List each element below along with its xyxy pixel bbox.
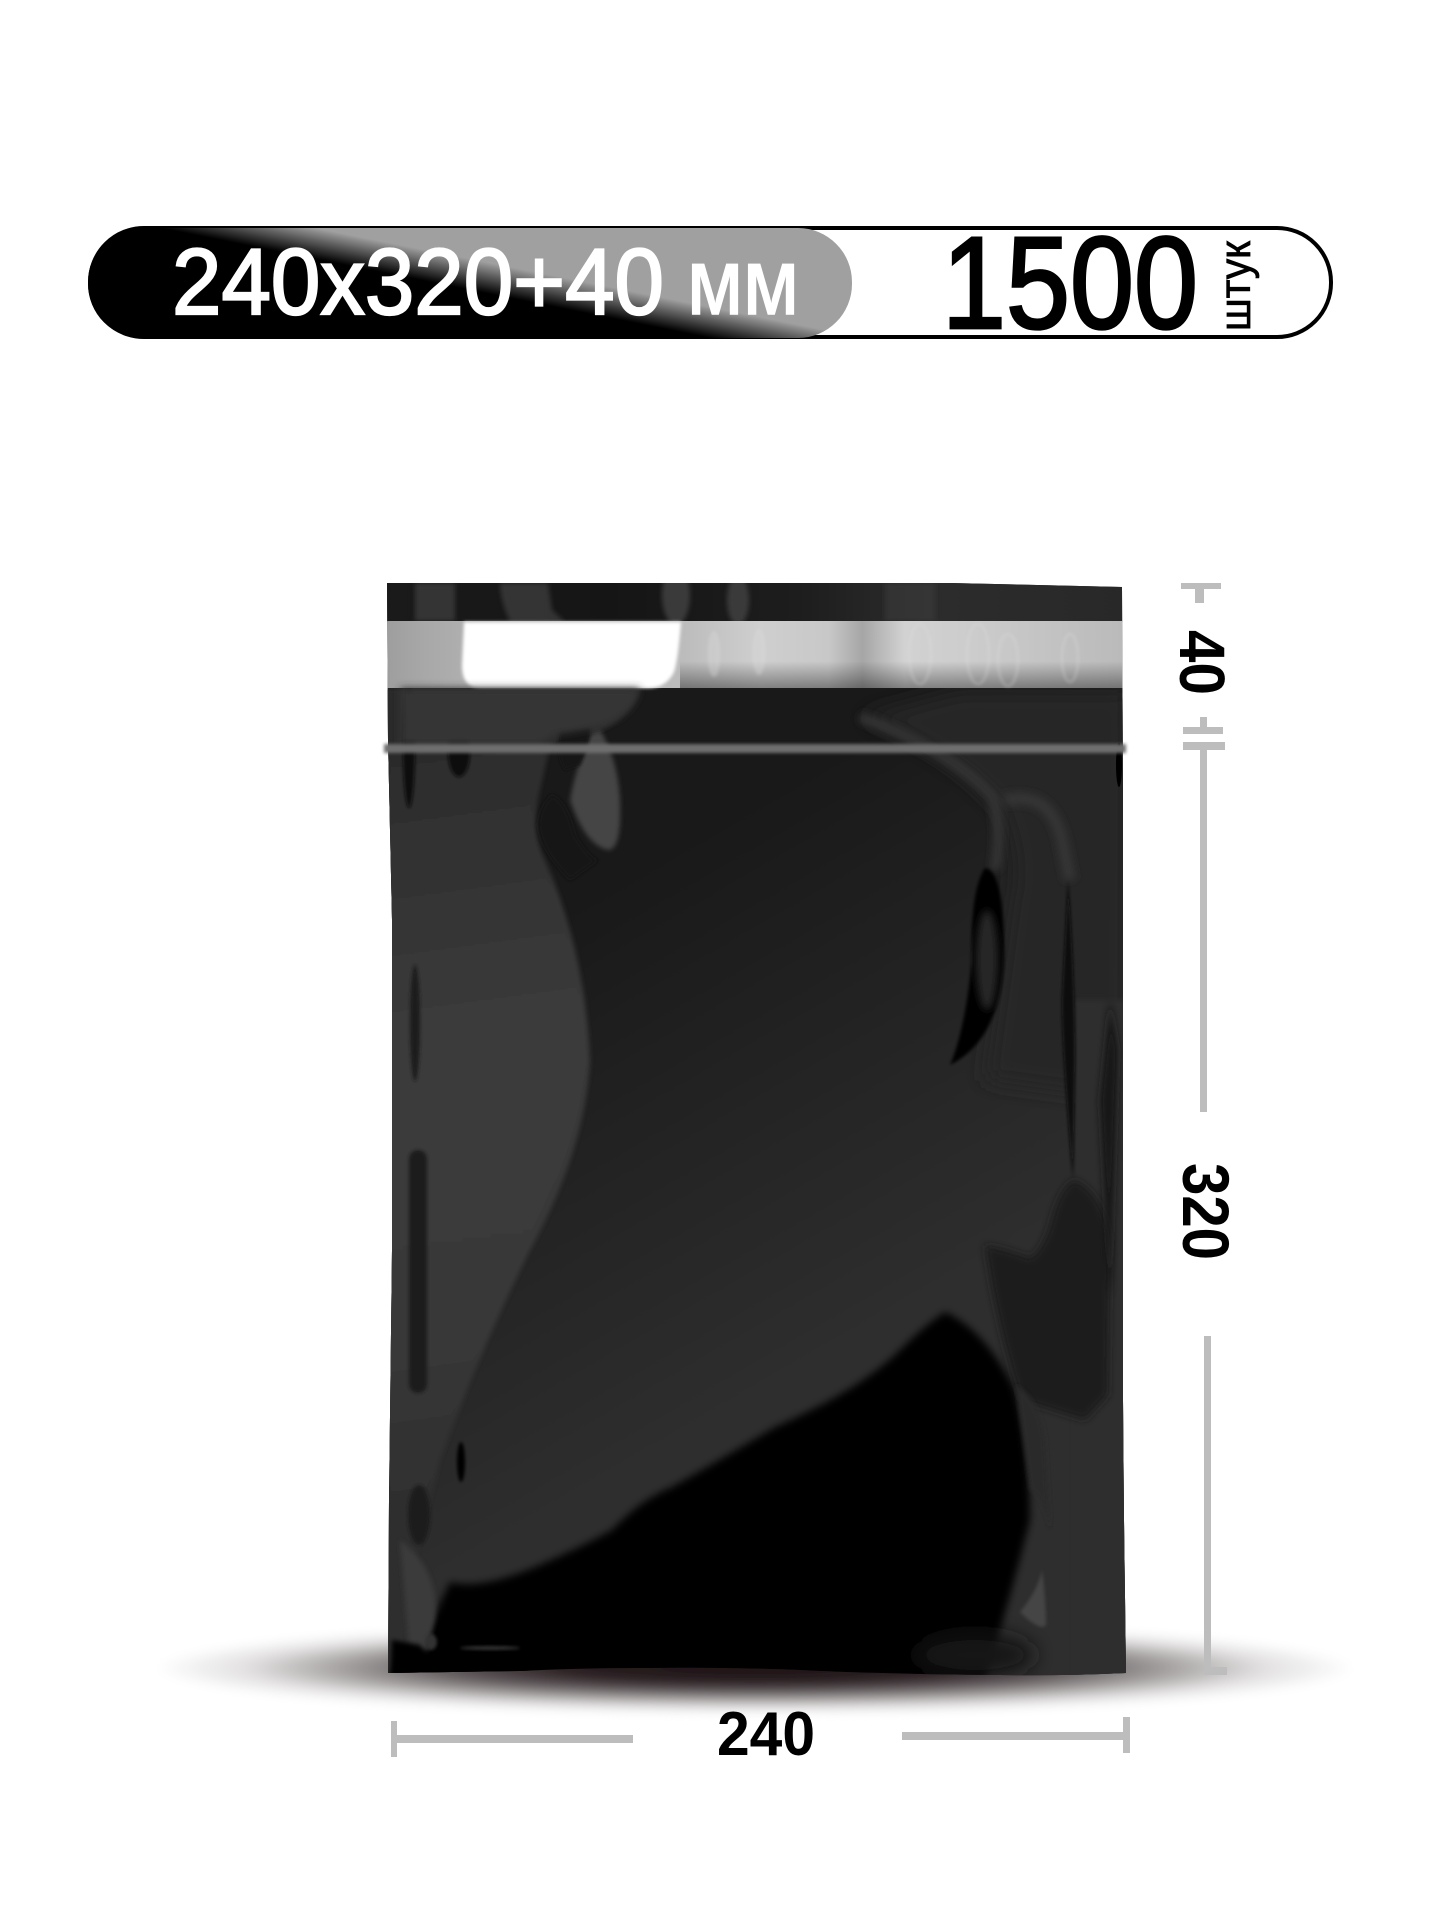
dimension: width 240	[391, 1700, 1130, 1769]
tape ripple marks	[709, 634, 1078, 688]
right slit lines	[1100, 1000, 1118, 1300]
lower left black mark	[457, 1442, 465, 1482]
bottom left strip	[400, 1540, 436, 1660]
dark gradient size pill	[88, 228, 852, 338]
adhesive tape strip	[380, 621, 1140, 688]
dimension: height 320	[1169, 742, 1243, 1675]
label 240: 240	[717, 1700, 815, 1769]
dimension: flap 40	[1166, 583, 1238, 734]
black mailing bag	[380, 565, 1140, 1680]
pill outline	[90, 228, 1331, 337]
white tape window	[462, 622, 681, 688]
band reflections	[414, 583, 932, 621]
vertical dark slit	[1062, 880, 1075, 1180]
label 320: 320	[1169, 1163, 1243, 1260]
bag base	[380, 580, 1140, 1680]
unit text: мм	[687, 229, 799, 334]
upper right sheen region	[883, 690, 1123, 844]
ground shadow under bag	[155, 1622, 1355, 1714]
upper right crescent	[950, 868, 1004, 1065]
quantity unit, rotated: штук	[1211, 240, 1260, 331]
reflection lobe	[570, 730, 620, 850]
top band above tape	[387, 583, 1122, 622]
black oval	[447, 752, 472, 778]
sheen curves	[860, 717, 1070, 880]
right edge strip	[1078, 1004, 1126, 1675]
dark lobe beside reflection	[558, 727, 590, 770]
left light reflection	[388, 688, 610, 1645]
right lower sliver	[1020, 1570, 1046, 1627]
left edge slits	[403, 688, 430, 1545]
strip below tape highlight	[400, 688, 640, 745]
right bar	[902, 1717, 1130, 1753]
size text: 240x320+40	[172, 229, 664, 334]
left bar	[391, 1721, 633, 1757]
centre diagonal sheen	[380, 690, 1140, 1680]
lower line	[1204, 1336, 1227, 1675]
label 40: 40	[1166, 630, 1238, 695]
quantity number: 1500	[942, 209, 1198, 356]
bottom right soft sheen	[915, 1633, 1035, 1677]
right middle dark patch	[985, 1180, 1110, 1420]
size and quantity pill header	[88, 209, 1331, 356]
right lower lobe	[1017, 1388, 1032, 1489]
bottom tick	[1183, 717, 1223, 734]
black lower fold	[388, 1312, 1030, 1680]
upper line	[1183, 742, 1225, 1112]
top tick	[1181, 583, 1221, 603]
seal line across bag	[384, 744, 1126, 753]
